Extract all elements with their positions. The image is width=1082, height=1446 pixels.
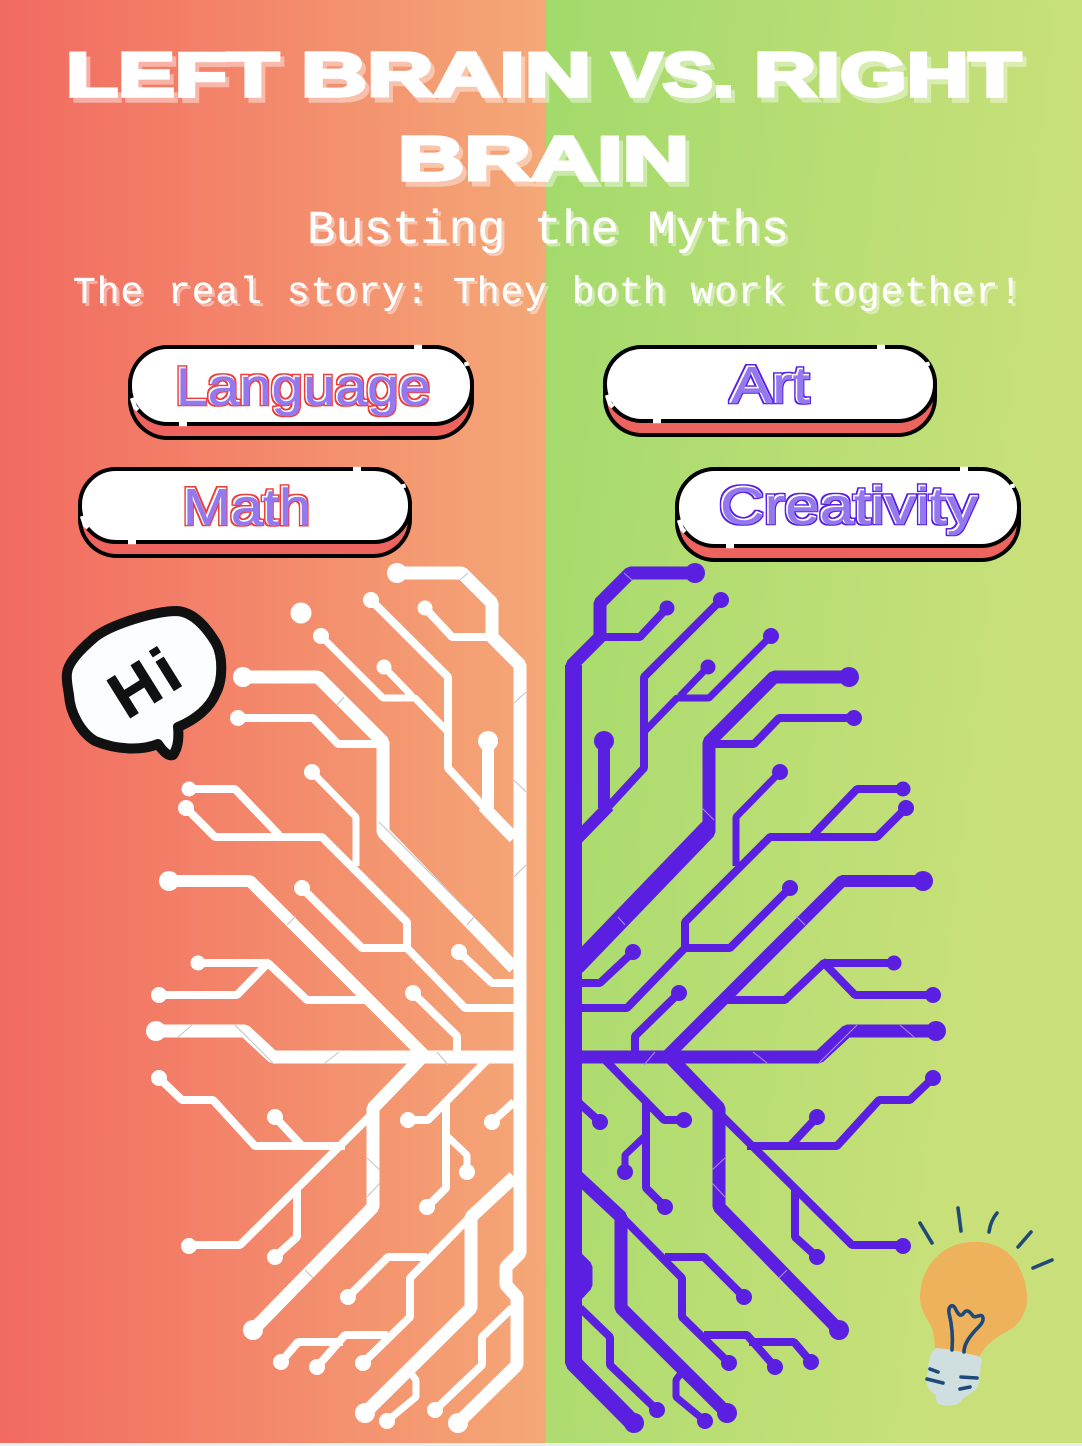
pill: Language [130,347,472,438]
title: RIGHT [754,41,1021,110]
title: BRAIN [398,125,689,194]
bottom strip [0,1443,1082,1446]
pill: Creativity [677,469,1019,560]
pill: Art [605,347,935,435]
pill: Math [80,469,410,556]
background: right green half [546,0,1082,1443]
tagline: The real story: They both work together! [73,272,1022,315]
background: left red-orange half [0,0,546,1443]
pill: Language: Language [175,357,430,416]
right brain circuit [572,563,946,1433]
title [66,41,1021,194]
pill: Creativity: Creativity [719,477,977,535]
left brain circuit [146,563,526,1433]
isolated white node [290,602,312,624]
title: LEFT [66,41,279,110]
subtitle: Busting the Myths [307,205,789,258]
title: BRAIN [301,41,591,110]
icon: Hi speech bubble [67,611,221,755]
icon: light bulb [920,1208,1052,1406]
pill: Art: Art [730,356,810,414]
pill: Math: Math [182,478,310,536]
title: VS. [612,41,734,110]
icon: Hi speech bubble: Hi [96,632,197,732]
